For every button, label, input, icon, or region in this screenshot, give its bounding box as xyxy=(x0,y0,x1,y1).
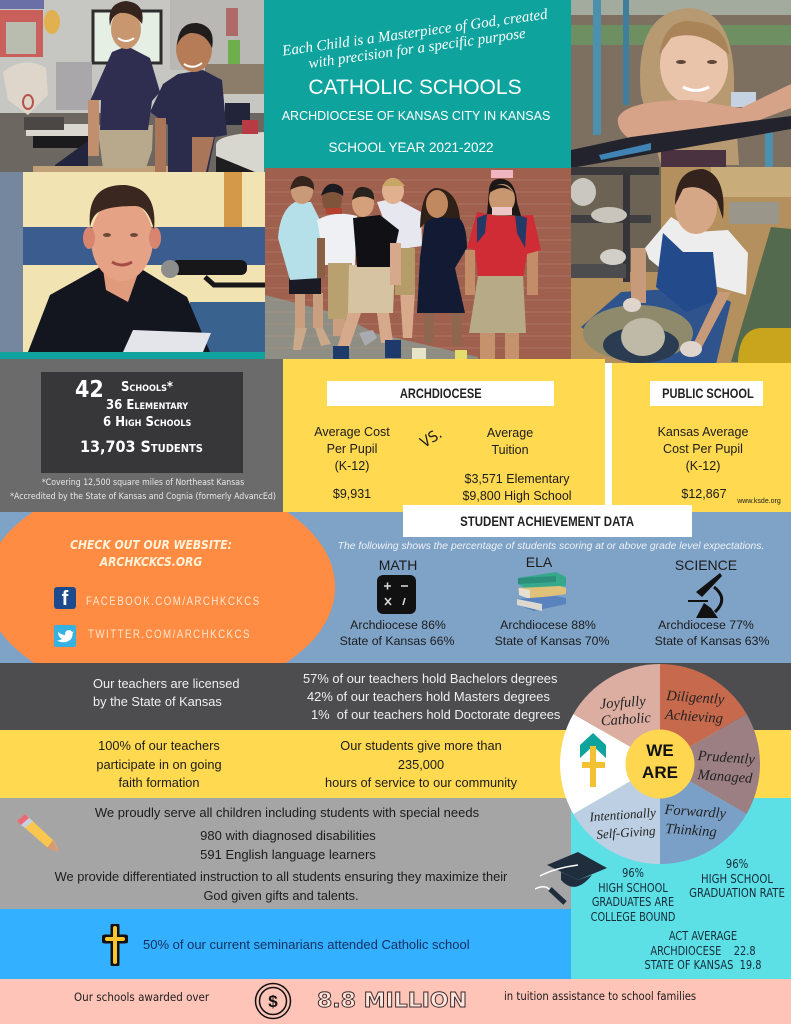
cost per pupil xyxy=(314,425,390,473)
diligently achieving text: Achieving xyxy=(663,707,723,727)
cost per pupil: (K-12) xyxy=(335,459,369,473)
graduation rate stats: 96% xyxy=(726,856,748,871)
faith formation text: 100% of our teachers xyxy=(98,738,220,753)
chalkboard xyxy=(41,372,243,473)
cost per pupil: Average Cost xyxy=(314,425,390,439)
panel: special needs xyxy=(0,798,571,909)
segment: logo xyxy=(560,714,660,814)
students line: 13,703 Students xyxy=(80,437,203,456)
prudently managed text: Prudently xyxy=(697,748,755,768)
service text xyxy=(325,738,517,790)
we are label: WE xyxy=(646,741,674,760)
orange ellipse xyxy=(0,512,335,663)
math scores xyxy=(340,618,454,648)
ELA scores: Archdiocese 88% xyxy=(500,618,596,632)
licensed text: Our teachers are licensed xyxy=(93,676,240,691)
special needs counts: 591 English language learners xyxy=(200,846,376,862)
faith formation text xyxy=(96,738,222,790)
archdiocese label: ARCHDIOCESE xyxy=(400,385,481,401)
science heading: SCIENCE xyxy=(675,557,737,573)
science scores: State of Kansas 63% xyxy=(655,634,769,648)
ACT average: STATE OF KANSAS 19.8 xyxy=(645,958,761,972)
intentionally self-giving text: Intentionally xyxy=(589,805,656,824)
ELA heading: ELA xyxy=(526,554,552,570)
panel: seminarians xyxy=(0,909,571,979)
title: CATHOLIC SCHOOLS xyxy=(308,76,522,99)
photo: two boys in classroom xyxy=(0,0,265,172)
achievement heading: STUDENT ACHIEVEMENT DATA xyxy=(461,513,634,529)
degrees text: 42% of our teachers hold Masters degrees xyxy=(307,689,550,704)
service text: Our students give more than xyxy=(340,738,502,753)
award amount: 8.8 MILLION xyxy=(317,988,467,1012)
website callout: ARCHKCKCS.ORG xyxy=(100,555,202,569)
ACT average: ARCHDIOCESE 22.8 xyxy=(650,944,756,958)
panel: public school cost xyxy=(612,363,791,512)
tuition figures: $3,571 Elementary xyxy=(465,472,569,486)
diligently achieving text: Diligently xyxy=(666,688,725,708)
panel: school count xyxy=(0,359,283,512)
tagline: Each Child is a Masterpiece of God, created xyxy=(281,7,549,60)
website callout: CHECK OUT OUR WEBSITE: xyxy=(70,538,232,552)
special needs counts: 980 with diagnosed disabilities xyxy=(200,828,376,843)
segment: prudently managed xyxy=(660,714,760,814)
icon: facebook: f xyxy=(62,588,68,610)
math scores: State of Kansas 66% xyxy=(340,634,454,648)
panel: tuition assistance xyxy=(0,979,791,1024)
special needs counts xyxy=(200,828,376,862)
panel: student achievement xyxy=(0,512,791,663)
segment: diligently achieving xyxy=(660,664,747,764)
archdiocese label xyxy=(327,381,554,406)
science scores: Archdiocese 77% xyxy=(658,618,754,632)
versus: VS. xyxy=(417,425,445,451)
licensed text: by the State of Kansas xyxy=(93,694,222,709)
intentionally self-giving text: Self-Giving xyxy=(596,823,656,842)
ELA scores xyxy=(495,618,609,648)
icon: logo cross xyxy=(580,733,606,787)
tuition assistance text: in tuition assistance to school families xyxy=(504,990,696,1003)
public school label: PUBLIC SCHOOL xyxy=(662,385,754,401)
degrees text: 57% of our teachers hold Bachelors degrees xyxy=(303,671,557,686)
facebook link: FACEBOOK.COM/ARCHKCKCS xyxy=(86,594,261,608)
twitter link: TWITTER.COM/ARCHKCKCS xyxy=(88,627,251,641)
icon: facebook xyxy=(54,587,76,609)
tuition: Tuition xyxy=(491,443,529,457)
icon: books xyxy=(517,572,566,611)
icon: dollar coin xyxy=(254,982,292,1020)
Kansas cost per pupil: Kansas Average xyxy=(658,425,748,439)
white divider xyxy=(605,363,612,512)
faith formation text: participate in on going xyxy=(96,756,222,772)
joyfully catholic text: Joyfully xyxy=(599,693,646,713)
panel: faith formation and service xyxy=(0,730,791,798)
icon: pencil xyxy=(17,814,59,852)
differentiated instruction text: God given gifts and talents. xyxy=(203,888,359,902)
public school label xyxy=(650,381,763,406)
forwardly thinking text: Forwardly xyxy=(664,802,727,822)
teal strip xyxy=(0,352,265,359)
photo: smiling girl leaning on rail xyxy=(571,0,791,167)
Kansas cost figure: $12,867 xyxy=(681,487,727,501)
website callout xyxy=(70,538,232,569)
photo: boy at microphone xyxy=(0,172,265,352)
joyfully catholic text: Catholic xyxy=(600,710,652,730)
tuition figures: $9,800 High School xyxy=(462,489,572,503)
icon: cross xyxy=(102,924,128,966)
tuition xyxy=(486,426,533,457)
graduation rate stats: HIGH SCHOOL xyxy=(701,870,773,886)
math heading: MATH xyxy=(379,557,417,573)
segment: forwardly thinking xyxy=(660,764,747,864)
coverage footnote: *Covering 12,500 square miles of Northeast Kansas xyxy=(42,478,244,488)
college bound stats: HIGH SCHOOL xyxy=(598,880,668,894)
licensed text xyxy=(93,676,240,709)
tuition: Average xyxy=(487,426,533,440)
achievement intro: The following shows the percentage of students scoring at or above grade level expectations. xyxy=(338,541,764,552)
photo: girl at pottery wheel xyxy=(571,167,791,363)
high schools line: 6 High Schools xyxy=(103,415,191,430)
college bound stats: GRADUATES ARE xyxy=(592,894,674,909)
science scores xyxy=(655,618,769,648)
we are wheel xyxy=(560,664,760,864)
cost per pupil: Per Pupil xyxy=(327,442,377,456)
ELA scores: State of Kansas 70% xyxy=(495,634,609,648)
icon: graduation cap xyxy=(535,852,607,905)
icon: microscope xyxy=(688,573,724,618)
achievement heading xyxy=(403,505,692,537)
header panel xyxy=(265,0,571,168)
Kansas cost per pupil xyxy=(658,425,748,473)
segment: joyfully catholic xyxy=(573,664,660,764)
prudently managed text: Managed xyxy=(696,767,754,787)
ACT average xyxy=(645,929,761,972)
special needs intro: We proudly serve all children including students with special needs xyxy=(95,805,479,820)
service text: 235,000 xyxy=(398,756,444,772)
icon: calculator xyxy=(377,575,416,614)
Kansas cost per pupil: (K-12) xyxy=(686,459,720,473)
photo: six children by brick wall xyxy=(265,168,571,359)
schools line: Schools* xyxy=(121,380,173,395)
degrees text xyxy=(303,671,560,722)
degrees text: 1% of our teachers hold Doctorate degrees xyxy=(311,707,560,722)
seminarians text: 50% of our current seminarians attended Catholic school xyxy=(143,937,470,952)
subtitle: ARCHDIOCESE OF KANSAS CITY IN KANSAS xyxy=(282,109,550,123)
forwardly thinking text: Thinking xyxy=(665,821,717,841)
icon: twitter xyxy=(54,625,76,647)
elementary line: 36 Elementary xyxy=(106,398,188,413)
math scores: Archdiocese 86% xyxy=(350,618,446,632)
tagline: with precision for a specific purpose xyxy=(308,26,527,72)
cost figure: $9,931 xyxy=(333,487,371,501)
faith formation text: faith formation xyxy=(118,775,200,790)
panel: graduation stats xyxy=(571,798,791,979)
differentiated instruction text: We provide differentiated instruction to all students ensuring they maximize their xyxy=(55,869,507,884)
are label: ARE xyxy=(642,763,678,782)
graduation rate stats xyxy=(689,856,785,900)
tuition figures xyxy=(462,472,572,503)
awarded text: Our schools awarded over xyxy=(74,990,209,1004)
source: www.ksde.org xyxy=(737,498,781,505)
service text: hours of service to our community xyxy=(325,775,517,790)
graduation rate stats: GRADUATION RATE xyxy=(689,885,785,900)
panel: archdiocese cost xyxy=(283,359,605,512)
accreditation footnote: *Accredited by the State of Kansas and Cognia (formerly AdvancEd) xyxy=(10,492,276,502)
ACT average: ACT AVERAGE xyxy=(669,929,737,943)
center circle xyxy=(626,730,694,798)
Kansas cost per pupil: Cost Per Pupil xyxy=(663,442,743,456)
icon: dollar coin: $ xyxy=(268,992,278,1011)
school year: SCHOOL YEAR 2021-2022 xyxy=(328,140,494,155)
number of schools: 42 xyxy=(75,377,104,403)
college bound stats: COLLEGE BOUND xyxy=(591,908,675,924)
panel: teacher licensing xyxy=(0,663,791,730)
differentiated instruction text xyxy=(54,869,508,902)
college bound stats xyxy=(591,865,675,924)
segment: intentionally self-giving xyxy=(573,764,660,864)
college bound stats: 96% xyxy=(622,865,644,880)
